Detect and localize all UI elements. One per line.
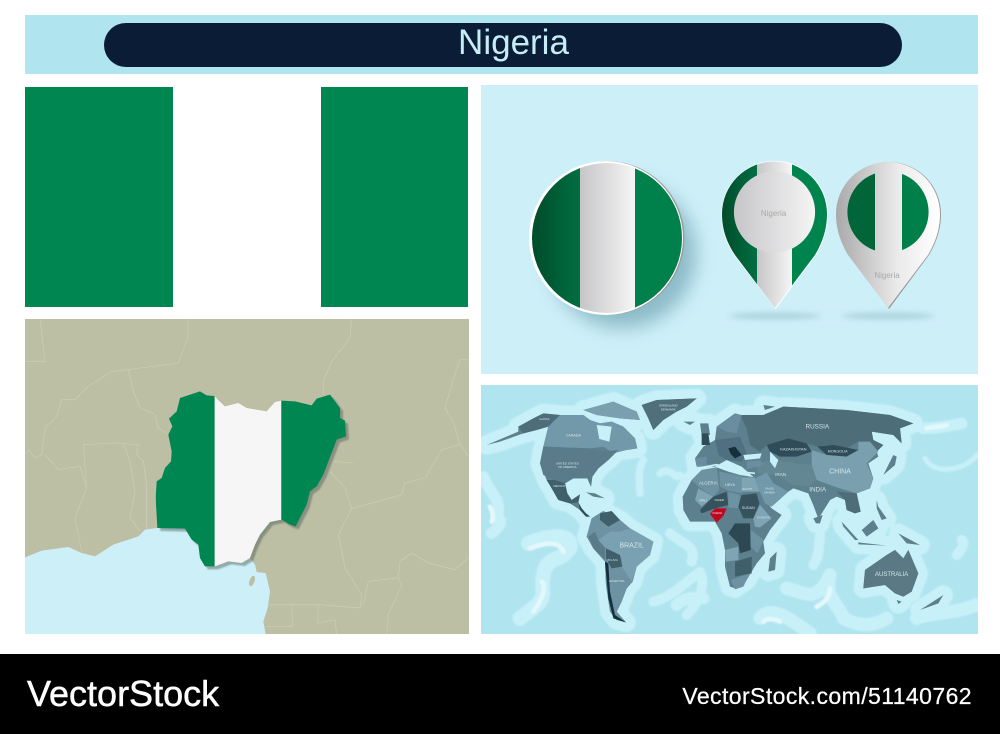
Africa: SUDAN bbox=[742, 506, 755, 510]
Americas: BRAZIL bbox=[619, 542, 644, 549]
Africa: ALGERIA bbox=[699, 481, 718, 486]
icon: round flag badge bbox=[529, 160, 696, 328]
Greenland bbox=[642, 398, 697, 430]
image reference: VectorStock.com/51140762 bbox=[682, 683, 972, 709]
DR Congo bbox=[728, 523, 751, 553]
Eurasia and Oceania: INDIA bbox=[809, 487, 827, 494]
South Africa bbox=[731, 573, 750, 589]
Mali bbox=[695, 488, 713, 507]
Australia bbox=[863, 550, 918, 597]
Africa: NIGERIA bbox=[713, 512, 723, 515]
Americas bbox=[487, 398, 697, 622]
Eurasia and Oceania: KAZAKHSTAN bbox=[780, 447, 807, 452]
icon: map pin with flag disc: Nigeria bbox=[874, 271, 900, 280]
Eurasia and Oceania: SAUDI bbox=[765, 487, 774, 491]
Nigeria flag silhouette bbox=[156, 392, 346, 566]
Angola bbox=[725, 547, 738, 562]
Venezuela bbox=[600, 511, 620, 527]
title pill bbox=[104, 23, 902, 67]
Bolivia bbox=[606, 548, 622, 568]
Libya bbox=[719, 472, 742, 493]
southern Africa bbox=[735, 557, 752, 577]
Nigeria shadow bbox=[159, 394, 349, 569]
Brazil bbox=[598, 528, 653, 582]
USA bbox=[540, 447, 618, 487]
Africa: LIBYA bbox=[725, 483, 736, 487]
Nigeria highlight bbox=[710, 508, 727, 523]
Caspian Sea bbox=[770, 452, 778, 468]
India bbox=[808, 485, 835, 518]
Africa bbox=[683, 467, 782, 589]
Africa: EGYPT bbox=[742, 487, 753, 491]
Americas: BOLIVIA bbox=[607, 558, 618, 562]
Romania area bbox=[728, 447, 742, 458]
Eurasia and Oceania: AUSTRALIA bbox=[875, 572, 908, 578]
Ethiopia bbox=[753, 505, 772, 527]
Africa: MALI bbox=[699, 498, 707, 502]
panel: national flag bbox=[25, 87, 468, 307]
Americas: GREENLAND bbox=[659, 404, 678, 408]
header band bbox=[25, 15, 978, 74]
footer bar bbox=[0, 654, 1000, 734]
Americas: ARGENTINA bbox=[609, 579, 625, 583]
panel: regional map of Nigeria bbox=[25, 318, 470, 635]
Chad bbox=[728, 492, 740, 508]
island bbox=[249, 576, 255, 586]
Eurasia and Oceania: CHINA bbox=[829, 468, 851, 475]
panel: badge and map pins bbox=[481, 85, 978, 374]
Eurasia and Oceania: MONGOLIA bbox=[828, 450, 848, 454]
Eurasia and Oceania: RUSSIA bbox=[806, 424, 830, 431]
Mediterranean bbox=[695, 465, 755, 473]
Central America bbox=[578, 502, 590, 517]
Scandinavia bbox=[717, 413, 742, 433]
France bbox=[703, 443, 718, 457]
UK bbox=[702, 433, 710, 445]
Hudson Bay bbox=[597, 425, 612, 442]
Americas: UNITED STATES bbox=[556, 461, 579, 465]
Iran region bbox=[755, 460, 817, 487]
Americas: CANADA bbox=[566, 433, 582, 437]
Black Sea bbox=[743, 453, 762, 460]
brighter shelf cores bbox=[490, 425, 947, 622]
Central Europe bbox=[715, 437, 747, 462]
Eurasia and Oceania: ARABIA bbox=[764, 490, 775, 494]
Russia bbox=[740, 407, 913, 452]
Americas: ALASKA bbox=[539, 417, 550, 421]
sea bbox=[25, 528, 270, 635]
ocean shelf shading bbox=[483, 398, 977, 633]
VectorStock logo: VectorStock bbox=[27, 673, 220, 714]
Eurasia and Oceania: IRAN bbox=[775, 472, 786, 477]
Americas: DENMARK bbox=[661, 407, 676, 411]
icon: map pin with white disc bbox=[720, 160, 829, 319]
China bbox=[812, 442, 878, 493]
Africa: ETHIOPIA bbox=[757, 515, 770, 519]
Alaska bbox=[518, 413, 560, 433]
icon: map pin with white disc: Nigeria bbox=[761, 209, 787, 218]
Peru bbox=[588, 532, 605, 560]
Mongolia bbox=[817, 445, 858, 457]
Tanzania bbox=[751, 530, 764, 553]
Algeria bbox=[692, 467, 719, 497]
Niger bbox=[700, 492, 728, 513]
South America base bbox=[587, 511, 653, 622]
panel: world map bbox=[481, 385, 978, 634]
Arabia bbox=[755, 472, 788, 507]
neighbouring country borders bbox=[25, 318, 470, 634]
Eurasia and Oceania bbox=[683, 405, 943, 610]
Europe bbox=[695, 413, 763, 473]
Chile bbox=[605, 562, 626, 622]
icon: map pin with flag disc bbox=[836, 162, 941, 319]
Eurasia and Oceania: TURKEY bbox=[747, 461, 759, 465]
Southeast Asia bbox=[837, 492, 861, 513]
Kazakhstan bbox=[767, 438, 812, 457]
Mexico bbox=[547, 480, 580, 503]
Sudan bbox=[738, 493, 759, 518]
title: Nigeria bbox=[458, 23, 569, 62]
Egypt bbox=[742, 477, 760, 492]
Americas: MEXICO bbox=[553, 484, 566, 488]
Africa: NIGER bbox=[715, 498, 725, 502]
Spain bbox=[695, 457, 707, 467]
Turkey bbox=[747, 460, 763, 469]
Americas: OF AMERICA bbox=[558, 465, 577, 469]
Canada bbox=[543, 415, 637, 453]
Arctic islands bbox=[583, 402, 640, 420]
